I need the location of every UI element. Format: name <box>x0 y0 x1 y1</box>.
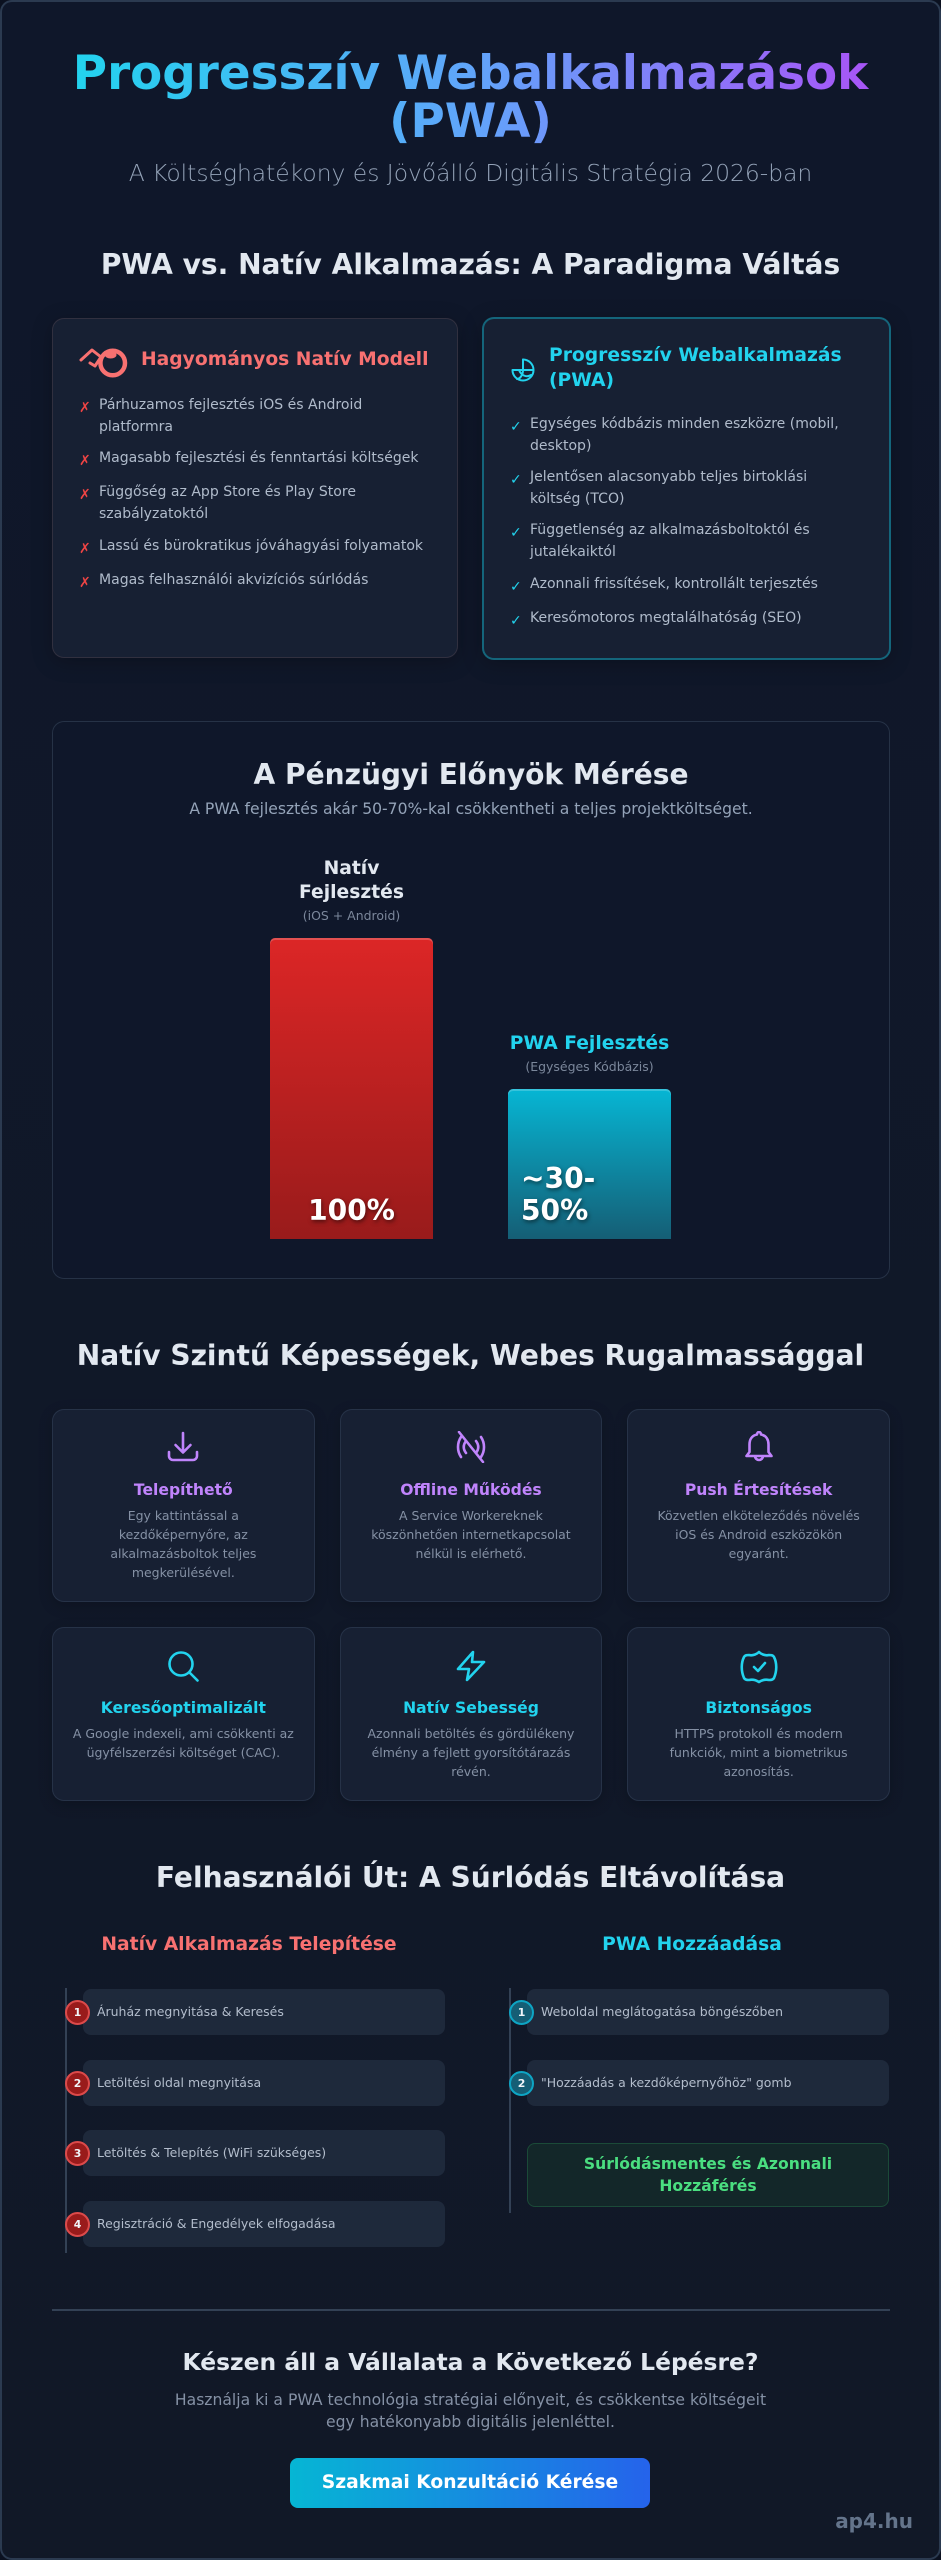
icon: download <box>168 1432 198 1462</box>
label: PWA: PWA Fejlesztés <box>510 1033 669 1054</box>
card description: alkalmazásboltok teljes <box>110 1546 256 1561</box>
timeline: PWA steps <box>509 1988 889 2213</box>
heading: paradigm shift: PWA vs. Natív Alkalmazás: A Paradigma Váltás <box>101 248 840 281</box>
step 1 <box>509 1989 889 2035</box>
bar: native development <box>270 858 433 1239</box>
bar fill: PWA <box>508 1089 671 1239</box>
CTA text: Használja ki a PWA technológia stratégiai előnyeit, és csökkentse költségeit <box>175 2391 766 2409</box>
list item: Függőség az App Store és Play Store <box>99 484 356 500</box>
step 4: Regisztráció & Engedélyek elfogadása <box>97 2216 336 2231</box>
step 4 <box>65 2201 445 2247</box>
card: installable <box>52 1409 315 1602</box>
card: offline <box>340 1409 602 1602</box>
icon: offline <box>456 1431 486 1463</box>
step 1: Weboldal meglátogatása böngészőben <box>541 2004 783 2019</box>
card: speed <box>340 1627 602 1801</box>
icon: lightning <box>456 1650 486 1682</box>
list item: Párhuzamos fejlesztés iOS és Android <box>99 397 362 413</box>
callout: frictionless: Súrlódásmentes és Azonnali <box>584 2155 832 2173</box>
step 2: Letöltési oldal megnyitása <box>97 2075 261 2090</box>
card description <box>368 1726 574 1779</box>
callout: frictionless <box>527 2143 889 2207</box>
card description: azonosítás. <box>723 1764 794 1779</box>
list item: Magas felhasználói akvizíciós súrlódás <box>99 572 368 588</box>
step 2: "Hozzáadás a kezdőképernyőhöz" gomb <box>541 2075 792 2090</box>
value: 100%: 100% <box>308 1194 395 1227</box>
list item: ✗ <box>79 487 91 503</box>
step 2: 2 <box>74 2077 81 2090</box>
step 2 <box>509 2060 889 2106</box>
list item <box>510 469 807 507</box>
step 1: 1 <box>518 2006 525 2019</box>
icon: bell <box>745 1431 773 1462</box>
card: SEO <box>52 1627 315 1801</box>
panel: financial benefits <box>52 721 890 1279</box>
panel: native model <box>52 318 458 658</box>
CTA button: Szakmai Konzultáció Kérése <box>322 2472 618 2493</box>
card title: Push Értesítések <box>685 1481 832 1499</box>
list item: költség (TCO) <box>530 491 624 507</box>
label: PWA: (Egységes Kódbázis) <box>525 1059 654 1074</box>
card description: ügyfélszerzési költséget (CAC). <box>87 1745 280 1760</box>
step 1: Áruház megnyitása & Keresés <box>97 2004 284 2019</box>
CTA text <box>175 2391 766 2431</box>
list item: platformra <box>99 419 173 435</box>
list item: Jelentősen alacsonyabb teljes birtoklási <box>530 469 807 485</box>
card description: Azonnali betöltés és gördülékeny <box>368 1726 574 1741</box>
list item: jutalékaiktól <box>530 544 616 560</box>
card description: A Google indexeli, ami csökkenti az <box>73 1726 294 1741</box>
card description <box>110 1508 256 1580</box>
CTA button <box>290 2458 650 2508</box>
icon: search <box>168 1651 199 1682</box>
value: 30-50%: ~30- <box>521 1162 595 1195</box>
bar: PWA development <box>508 1033 671 1239</box>
step 1: 1 <box>74 2006 81 2019</box>
heading: financial: A Pénzügyi Előnyök Mérése <box>253 758 688 791</box>
list item: desktop) <box>530 438 591 454</box>
step 2: 2 <box>518 2077 525 2090</box>
step 1 <box>65 1989 445 2035</box>
title <box>71 51 870 146</box>
icon: PWA <box>512 358 534 382</box>
divider <box>52 2309 890 2311</box>
step 2 <box>65 2060 445 2106</box>
list item: ✗ <box>79 453 91 469</box>
card description: kezdőképernyőre, az <box>119 1527 248 1542</box>
card description: A Service Workereknek <box>399 1508 543 1523</box>
list item: ✓ <box>510 525 522 541</box>
card description <box>371 1508 571 1561</box>
heading: PWA model: Progresszív Webalkalmazás <box>549 345 842 366</box>
list item: Azonnali frissítések, kontrollált terjesztés <box>530 576 818 592</box>
step 4: 4 <box>74 2218 81 2231</box>
heading: native model: Hagyományos Natív Modell <box>141 349 428 370</box>
card description: köszönhetően internetkapcsolat <box>371 1527 571 1542</box>
card description: élmény a fejlett gyorsítótárazás <box>372 1745 570 1760</box>
label: native <box>299 858 404 923</box>
list item: Függetlenség az alkalmazásboltoktól és <box>530 522 810 538</box>
list item <box>510 522 810 560</box>
card description: egyaránt. <box>729 1546 789 1561</box>
subtitle: A Költséghatékony és Jövőálló Digitális Stratégia 2026-ban <box>129 159 812 187</box>
panel: PWA model <box>482 317 891 660</box>
card: push notifications <box>627 1409 890 1602</box>
step 3 <box>65 2130 445 2176</box>
list item: ✓ <box>510 613 522 629</box>
callout: frictionless: Hozzáférés <box>659 2177 757 2195</box>
bar fill: native 100% <box>270 938 433 1239</box>
card description: Egy kattintással a <box>128 1508 239 1523</box>
card title: Biztonságos <box>705 1699 812 1717</box>
card title: Telepíthető <box>134 1481 233 1499</box>
timeline: native steps <box>65 1988 445 2253</box>
card description <box>657 1508 860 1561</box>
title: Progresszív Webalkalmazások <box>73 47 868 101</box>
card description: HTTPS protokoll és modern <box>674 1726 843 1741</box>
label: PWA <box>510 1033 669 1074</box>
label: native: Fejlesztés <box>299 882 404 903</box>
list item <box>79 397 362 435</box>
card description: funkciók, mint a biometrikus <box>670 1745 848 1760</box>
step 3: Letöltés & Telepítés (WiFi szükséges) <box>97 2145 326 2160</box>
card: secure <box>627 1627 890 1801</box>
list item: Keresőmotoros megtalálhatóság (SEO) <box>530 610 802 626</box>
heading: PWA journey: PWA Hozzáadása <box>602 1934 782 1955</box>
card description: iOS és Android eszközökön <box>675 1527 842 1542</box>
icon: shield <box>740 1650 778 1684</box>
list item: szabályzatoktól <box>99 506 208 522</box>
heading: user journey: Felhasználói Út: A Súrlódás Eltávolítása <box>156 1861 785 1894</box>
financial subtitle: A PWA fejlesztés akár 50-70%-kal csökkentheti a teljes projektköltséget. <box>189 800 753 818</box>
list item: Lassú és bürokratikus jóváhagyási folyamatok <box>99 538 423 554</box>
card title: Natív Sebesség <box>403 1699 539 1717</box>
value: 30-50% <box>521 1162 597 1227</box>
CTA heading: Készen áll a Vállalata a Következő Lépésre? <box>183 2348 758 2376</box>
step 3: 3 <box>74 2147 81 2160</box>
card title: Keresőoptimalizált <box>101 1699 266 1717</box>
list item: ✗ <box>79 400 91 416</box>
list item: Magasabb fejlesztési és fenntartási költségek <box>99 450 418 466</box>
heading: native journey: Natív Alkalmazás Telepítése <box>101 1934 397 1955</box>
heading: capabilities: Natív Szintű Képességek, Webes Rugalmassággal <box>77 1339 864 1372</box>
list item: ✗ <box>79 541 91 557</box>
list item: ✓ <box>510 579 522 595</box>
label: native: Natív <box>324 858 379 879</box>
CTA text: egy hatékonyabb digitális jelenléttel. <box>326 2413 615 2431</box>
list item: ✗ <box>79 575 91 591</box>
heading: PWA model: (PWA) <box>549 370 614 391</box>
card description <box>73 1726 294 1760</box>
value: 30-50%: 50% <box>521 1194 588 1227</box>
card title: Offline Működés <box>400 1481 542 1499</box>
heading: PWA model <box>549 345 842 391</box>
list item: ✓ <box>510 472 522 488</box>
card description <box>670 1726 848 1779</box>
list item: ✓ <box>510 419 522 435</box>
list item: Egységes kódbázis minden eszközre (mobil, <box>530 416 839 432</box>
card description: megkerülésével. <box>132 1565 235 1580</box>
list item <box>510 416 839 454</box>
label: native: (iOS + Android) <box>303 908 400 923</box>
icon: native model <box>79 348 128 378</box>
card description: nélkül is elérhető. <box>416 1546 526 1561</box>
card description: Közvetlen elköteleződés növelés <box>657 1508 860 1523</box>
card description: révén. <box>451 1764 491 1779</box>
title: (PWA) <box>389 94 552 148</box>
list item <box>79 484 356 522</box>
watermark: ap4.hu <box>835 2509 913 2533</box>
